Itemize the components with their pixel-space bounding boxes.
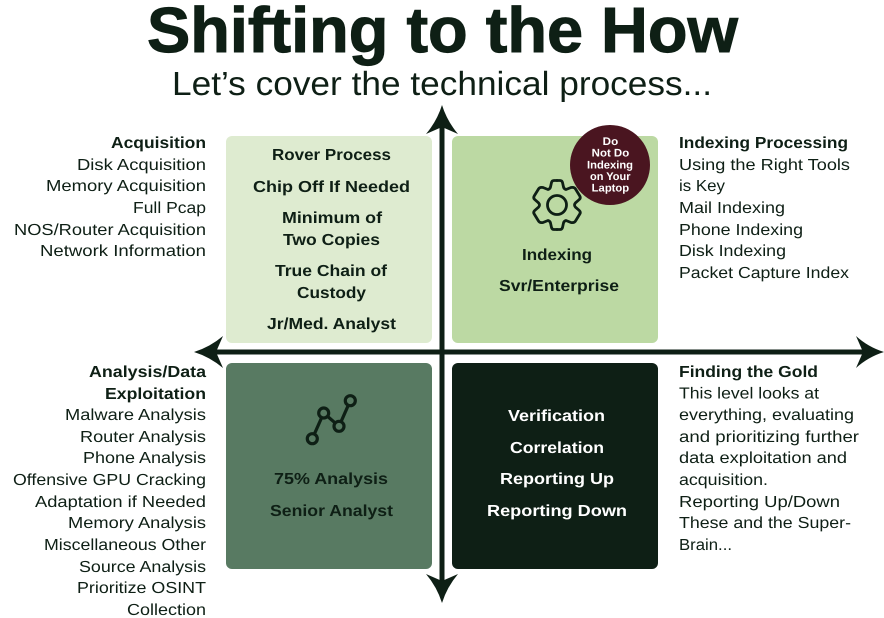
text block: analysis and data exploitation: Exploitation bbox=[105, 386, 206, 403]
text block: indexing processing: Using the Right Tools bbox=[679, 157, 850, 174]
text block: finding the gold: everything, evaluating bbox=[679, 407, 854, 424]
callout: do not do indexing on your laptop: Laptop bbox=[592, 183, 629, 195]
arrow: horizontal axis bbox=[194, 336, 884, 368]
panel: finding the gold quadrant: Correlation bbox=[510, 440, 604, 457]
panel: acquisition quadrant: Jr/Med. Analyst bbox=[267, 316, 397, 333]
text block: analysis and data exploitation: Source Analysis bbox=[79, 559, 206, 576]
text block: acquisition: Disk Acquisition bbox=[77, 157, 206, 174]
text block: finding the gold: These and the Super- bbox=[679, 515, 851, 532]
callout: do not do indexing on your laptop: Not Do bbox=[592, 148, 629, 160]
text block: acquisition: Memory Acquisition bbox=[46, 178, 206, 195]
panel: acquisition quadrant: Chip Off If Needed bbox=[253, 179, 410, 196]
text block: indexing processing: Packet Capture Index bbox=[679, 265, 849, 282]
text block: analysis and data exploitation: Analysis/Data bbox=[89, 364, 206, 381]
panel: indexing quadrant: Svr/Enterprise bbox=[499, 278, 619, 295]
callout: do not do indexing on your laptop: Indexing bbox=[587, 159, 633, 171]
callout: do not do indexing on your laptop: on Your bbox=[590, 171, 631, 183]
panel: indexing quadrant bbox=[452, 136, 658, 343]
text block: analysis and data exploitation: Malware Analysis bbox=[65, 407, 206, 424]
text block: finding the gold: Finding the Gold bbox=[679, 364, 818, 381]
text block: indexing processing: Indexing Processing bbox=[679, 135, 848, 152]
text block: acquisition: Full Pcap bbox=[133, 200, 206, 217]
text block: indexing processing: Mail Indexing bbox=[679, 200, 785, 217]
text block: analysis and data exploitation: Router Analysis bbox=[80, 429, 206, 446]
text block: finding the gold: and prioritizing further bbox=[679, 429, 860, 446]
text block: finding the gold: data exploitation and bbox=[679, 450, 847, 467]
panel: acquisition quadrant bbox=[226, 136, 432, 343]
panel: acquisition quadrant: True Chain of bbox=[275, 263, 388, 280]
text block: analysis and data exploitation bbox=[13, 364, 207, 618]
text block: indexing processing bbox=[679, 135, 850, 282]
text block: analysis and data exploitation: Memory Analysis bbox=[68, 515, 206, 532]
icon: gear bbox=[534, 180, 580, 230]
callout: do not do indexing on your laptop bbox=[570, 125, 650, 205]
text block: finding the gold: acquisition. bbox=[679, 472, 768, 489]
panel: acquisition quadrant: Rover Process bbox=[272, 147, 391, 164]
panel: indexing quadrant: Indexing bbox=[522, 247, 592, 264]
panel: analysis quadrant bbox=[226, 363, 432, 569]
panel: finding the gold quadrant: Reporting Down bbox=[487, 503, 627, 520]
text block: analysis and data exploitation: Prioritize OSINT bbox=[77, 580, 206, 597]
text block: analysis and data exploitation: Offensive GPU Cracking bbox=[13, 472, 206, 489]
panel: finding the gold quadrant bbox=[452, 363, 658, 569]
text block: acquisition: Network Information bbox=[40, 243, 206, 260]
text block: indexing processing: Disk Indexing bbox=[679, 243, 786, 260]
panel: analysis quadrant: 75% Analysis bbox=[274, 471, 388, 488]
text block: acquisition: Acquisition bbox=[111, 135, 206, 152]
panel: acquisition quadrant: Two Copies bbox=[283, 232, 380, 249]
panel: finding the gold quadrant: Verification bbox=[508, 408, 605, 425]
text block: finding the gold: Reporting Up/Down bbox=[679, 494, 840, 511]
text block: indexing processing: Phone Indexing bbox=[679, 222, 803, 239]
text block: indexing processing: is Key bbox=[679, 178, 725, 195]
subtitle: Let’s cover the technical process... bbox=[172, 66, 712, 103]
text block: analysis and data exploitation: Phone Analysis bbox=[83, 450, 206, 467]
panel: analysis quadrant: Senior Analyst bbox=[270, 503, 394, 520]
text block: finding the gold bbox=[679, 364, 860, 554]
arrow: vertical axis bbox=[426, 105, 458, 603]
panel: acquisition quadrant: Minimum of bbox=[282, 210, 383, 227]
text block: finding the gold: Brain... bbox=[679, 537, 732, 554]
icon: line chart bbox=[307, 396, 355, 444]
panel: finding the gold quadrant: Reporting Up bbox=[500, 471, 614, 488]
text block: acquisition: NOS/Router Acquisition bbox=[14, 222, 206, 239]
text block: analysis and data exploitation: Miscellaneous Other bbox=[44, 537, 207, 554]
callout: do not do indexing on your laptop: Do bbox=[603, 136, 618, 148]
panel: acquisition quadrant: Custody bbox=[297, 285, 366, 302]
text block: analysis and data exploitation: Adaptation if Needed bbox=[35, 494, 206, 511]
text block: finding the gold: This level looks at bbox=[679, 386, 820, 402]
text block: acquisition bbox=[14, 135, 206, 260]
